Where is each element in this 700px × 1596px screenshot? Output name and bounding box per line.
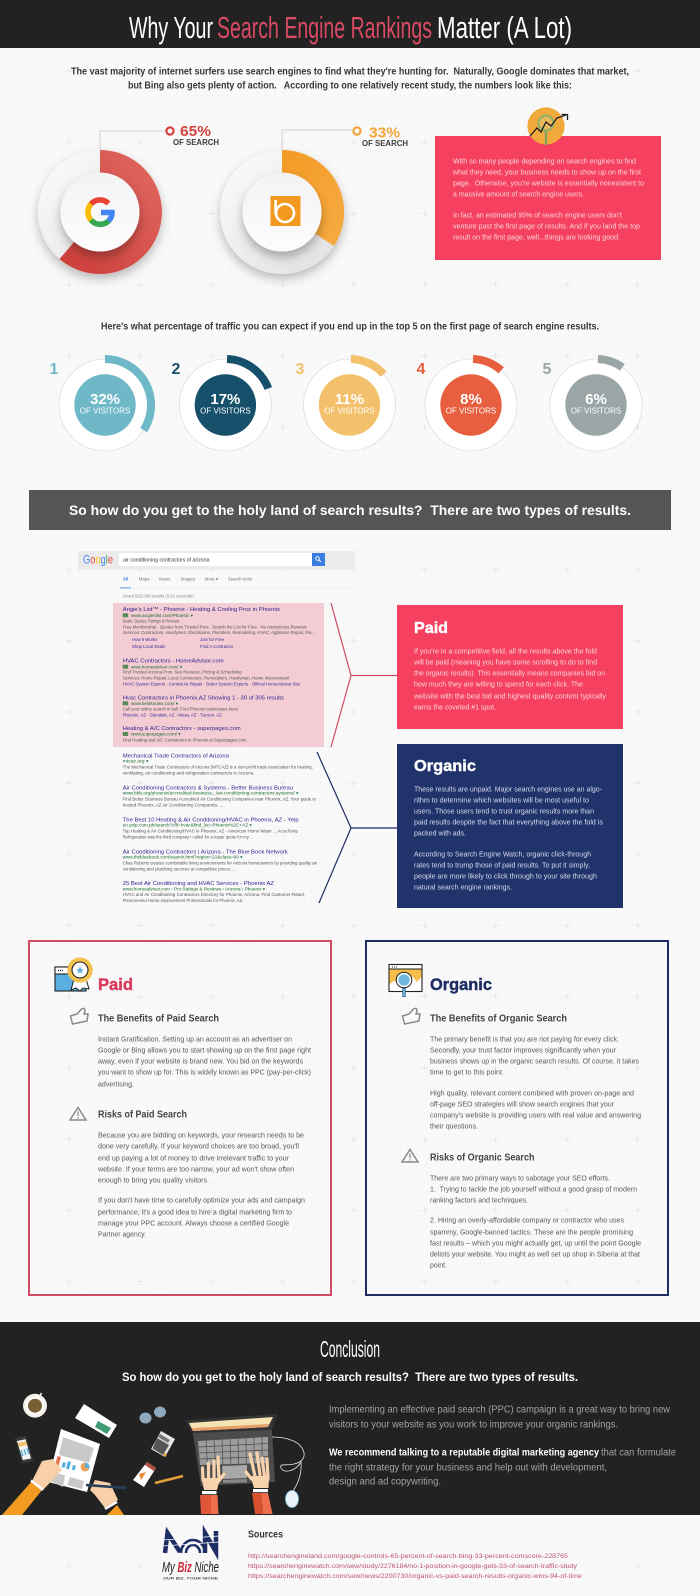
body text: will be paid (meaning you have some scrolling to do to find	[413, 659, 597, 666]
benefits text: time to get to this point.	[430, 1069, 504, 1076]
paid results: www.angieslist.com/Phoenix ▾	[131, 613, 193, 618]
benefits text	[98, 1036, 311, 1088]
heading: Sources	[248, 1530, 283, 1540]
risks text: website. If your terms are too narrow, your ad won't show often	[97, 1166, 294, 1173]
risks text	[97, 1132, 305, 1238]
icon: glasses	[140, 1406, 166, 1424]
google search bar: air conditioning contractors of arizona	[123, 558, 210, 564]
text block: what they need, your business needs to show up on the first	[452, 168, 642, 177]
benefits text: you want to show up for. This is widely known as PPC (pay-per-click)	[98, 1069, 311, 1076]
risks text: spammy, Google-banned tactics. These are the people promising	[430, 1229, 633, 1236]
paid results: Find A Contractor	[200, 644, 234, 649]
organic results: Air Conditioning Contractors | Arizona - The Blue Book Network	[123, 849, 288, 855]
icon: chart in magnifier	[527, 107, 568, 145]
panel: search engine users	[435, 107, 661, 260]
benefits text	[430, 1036, 641, 1130]
search tabs	[120, 576, 355, 598]
benefits text: business shows up in the organic search results. Of course, it takes	[430, 1058, 639, 1065]
banner: holy land question: So how do you get to the holy land of search results? There are two types of results.	[69, 503, 631, 518]
paid results: Services: Home Repair, Local Contractors, Remodelers, Handyman, Home Improvement	[123, 675, 290, 680]
risks text: performance, it's a good idea to hire a digital marketing firm to	[98, 1209, 292, 1216]
heading: conclusion: Conclusion	[320, 1336, 380, 1362]
panel: organic details	[366, 941, 668, 1295]
body text: If you're in a competitive field, all the results above the fold	[414, 648, 597, 655]
risks text: end up paying a lot of money to drive irrelevant traffic to your	[98, 1155, 290, 1162]
organic results: www.thebluebook.com/search.html?region=21&class=90 ▾	[123, 854, 242, 859]
organic results: Refrigeration was the third company I called for a repair quote for my ...	[123, 834, 253, 839]
heading: Organic	[430, 976, 492, 994]
chart: rank 4	[417, 359, 517, 451]
icon: calculator	[151, 1431, 175, 1457]
banner: holy land question	[29, 490, 671, 530]
conclusion text: Implementing an effective paid search (PPC) campaign is a great way to bring new	[329, 1404, 671, 1416]
chart: rank 3	[296, 359, 396, 451]
body text: natural search engine rankings.	[414, 884, 512, 891]
google search bar	[78, 551, 355, 570]
risks text: done very carefully. If your keyword choices are too broad, you'll	[98, 1143, 299, 1150]
risks text: point.	[430, 1262, 447, 1269]
paid results: Join for Free	[200, 637, 225, 642]
chart: rank 1: OF VISITORS	[80, 406, 130, 416]
chart: rank 2: OF VISITORS	[200, 406, 251, 416]
chart: rank 3: 11%	[335, 391, 364, 408]
title: Matter (A Lot)	[437, 10, 572, 45]
illustration: desk with laptop	[2, 1393, 304, 1515]
icon: Bing b	[270, 196, 300, 226]
search tabs: Search tools	[228, 576, 253, 582]
risks text: 1. Trying to tackle the job yourself without a good grasp of modern	[430, 1186, 637, 1193]
paid results: Heating & A/C Contractors - superpages.com	[123, 726, 241, 732]
label: 65% of search: OF SEARCH	[173, 137, 219, 147]
chart: rank 1: 32%	[90, 391, 120, 408]
body text: rates tend to trump those of paid results. To put it simply,	[414, 862, 590, 869]
conclusion text: design and ad copywriting.	[329, 1476, 441, 1488]
paid results: Find Trusted Arizona Pros. See Reviews, Pricing & Scheduling	[123, 670, 242, 675]
benefits text: advertising.	[98, 1081, 134, 1088]
search tabs: About 532,000 results (0.61 seconds)	[123, 594, 194, 598]
organic results	[123, 754, 318, 903]
source links	[248, 1553, 583, 1580]
benefits text: their questions.	[430, 1123, 478, 1130]
panel: conclusion	[0, 1322, 700, 1515]
paid results: Shop Local Deals	[132, 644, 165, 649]
conclusion text: the right strategy for your business and help out with development,	[329, 1462, 607, 1474]
logo: My Biz Niche: My Biz Niche	[162, 1559, 219, 1576]
subheading: Risks of Organic Search	[430, 1152, 534, 1164]
chart: rank 4: 8%	[460, 391, 482, 408]
icon: coffee cup	[23, 1393, 47, 1418]
heading: Paid	[98, 976, 133, 994]
header band with title	[0, 0, 700, 48]
risks text: There are two primary ways to sabotage your SEO efforts.	[430, 1175, 610, 1182]
paid results: Services: Contractors, Handymen, Electricians, Plumbers, Remodeling, HVAC, Appliance Repair, Pai...	[123, 630, 315, 635]
chart: rank 5	[543, 359, 642, 451]
paid results: HVAC Contractors - HomeAdvisor.com	[123, 659, 224, 665]
source links: http://searchengineland.com/google-controls-65-percent-of-search-bing-33-percent-comscore-228765	[248, 1553, 569, 1560]
risks text: manage your PPC account. Always choose a certified Google	[98, 1220, 289, 1227]
text block: result on the first page, well...things are looking good.	[453, 233, 620, 242]
risks text: Partner agency.	[98, 1231, 146, 1238]
heading: Organic	[414, 758, 476, 775]
body text: paid results despite the fact that everything above the fold is	[414, 819, 603, 826]
paid results: Deals, Quotes, Ratings & Reviews	[123, 618, 179, 624]
body text: earns the coveted #1 spot.	[414, 704, 496, 711]
chart: rank 1	[50, 359, 151, 451]
search tabs: News	[159, 576, 171, 582]
chart: rank 5: 6%	[585, 391, 607, 408]
organic results: The Best 10 Heating & Air Conditioning/HVAC in Phoenix, AZ - Yelp	[123, 817, 299, 823]
title: Search Engine Rankings	[217, 10, 432, 45]
source links: https://searchenginewatch.com/sew/study/2276184/no-1-position-in-google-gets-33-of-search-traffic-study	[248, 1563, 578, 1570]
paid results: www.homeadvisor.com/ ▾	[131, 664, 182, 669]
paid results: HVAC System Experts · Central Air Repair · Boiler System Experts · Official HomeAdvisor Site	[123, 681, 301, 686]
paid results: www.bestknows.com/ ▾	[131, 701, 178, 706]
subheading: The Benefits of Organic Search	[430, 1013, 567, 1025]
text block: venture past the first page of results. And if you land the top	[453, 222, 640, 231]
icon: phone	[15, 1436, 33, 1463]
organic results: Chas Roberts creates comfortable living environments for Arizona homeowners by providing quality air	[123, 861, 318, 866]
chart: rank 4: 4	[417, 361, 426, 378]
section heading: traffic: Here's what percentage of traffic you can expect if you end up in the top 5 on the first page of search engine results.	[101, 322, 599, 333]
organic results: www.homeadvisor.com › Pro Ratings & Reviews › Arizona › Phoenix ▾	[123, 886, 265, 891]
benefits text: The primary benefit is that you are not paying for every click.	[430, 1036, 619, 1043]
body text: how much they are willing to spend for each click. The	[414, 681, 583, 688]
search results screenshot	[78, 551, 355, 903]
organic results: 25 Best Air Conditioning and HVAC Services - Phoenix AZ	[123, 881, 274, 887]
icon: report	[48, 1429, 100, 1492]
benefits text: Google or Bing allows you to start showing up on the first page right	[98, 1047, 311, 1054]
search tabs: Images	[181, 576, 196, 582]
benefits text: Instant Gratification. Setting up an account as an advertiser on	[98, 1036, 292, 1043]
benefits text: away, even if your website is brand new. You bid on the keywords	[98, 1058, 304, 1065]
label: 33% of search: 33%	[369, 124, 400, 142]
title: Why Your	[129, 10, 213, 45]
chart: rank 4: OF VISITORS	[446, 406, 496, 416]
organic results: Find Better Business Bureau Accredited Air Conditioning Companies near Phoenix, AZ. Your guide to	[123, 797, 317, 802]
organic results: Mechanical Trade Contractors of Arizona	[123, 754, 230, 760]
chart: rank 3: OF VISITORS	[324, 406, 375, 416]
organic results: Air Conditioning Contractors & Systems - Better Business Bureau	[123, 785, 293, 791]
arrow: organic bracket	[317, 752, 398, 903]
intro text	[71, 66, 629, 92]
risks text: fast results – which you might actually get, up until the point Google	[430, 1240, 641, 1247]
heading: Paid	[414, 620, 448, 637]
body text	[413, 648, 606, 711]
icon: laptop	[185, 1414, 278, 1486]
risks text	[430, 1175, 641, 1269]
benefits text: off-page SEO strategies will show search engines that your	[430, 1101, 615, 1108]
icon: warning	[402, 1150, 418, 1162]
icon: note card and pencil	[133, 1462, 183, 1487]
body text: These results are unpaid. Major search engines use an algo-	[414, 786, 603, 793]
paid results: How It Works	[132, 637, 157, 642]
subheading: The Benefits of Paid Search	[98, 1013, 219, 1025]
panel: paid details	[29, 941, 331, 1295]
icon: window with ribbon badge	[55, 958, 92, 991]
body text: people are more likely to click through to your site through	[414, 873, 597, 880]
conclusion text: We recommend talking to a reputable digital marketing agency	[329, 1448, 599, 1458]
label: 65% of search	[166, 123, 219, 147]
risks text: ranking factors and techniques.	[430, 1197, 528, 1204]
organic results: trusted Phoenix, AZ Air Conditioning Companies, ...	[123, 803, 223, 808]
paid results: Hvac Contractors in Phoenix,AZ Showing 1 - 30 of 305 results	[123, 695, 284, 701]
chart: rank 1: 1	[50, 361, 59, 378]
body text: the organic results). This essentially means companies bid on	[414, 670, 605, 677]
search tabs: More ▾	[205, 576, 218, 582]
organic results: ventilating, air conditioning and refrigeration contractors in Arizona.	[123, 771, 254, 776]
label: 65% of search: 65%	[180, 123, 211, 140]
risks text: 2. Hiring an overly-affordable company or contractor who uses	[430, 1217, 624, 1224]
organic results: The Mechanical Trade Contractors of Arizona (MTCAZ) is a non-profit trade association for heating,	[123, 765, 313, 770]
risks text: enough to bring you quality visitors.	[98, 1177, 209, 1184]
organic results: Top Heating & Air Conditioning/HVAC in Phoenix, AZ - American Home Water ... AccuTemp	[123, 828, 299, 833]
text block	[452, 157, 644, 242]
text block: With so many people depending on search engines to find	[453, 157, 636, 166]
chart: rank 2: 2	[172, 361, 181, 378]
body text	[414, 786, 603, 891]
logo: My Biz Niche: OUR BIZ. YOUR NICHE	[163, 1576, 219, 1580]
chart: Google 65% donut	[38, 123, 219, 274]
subheading: Risks of Paid Search	[98, 1109, 187, 1121]
label: 33% of search	[353, 124, 408, 148]
source links: https://searchenginewatch.com/sew/news/2200730/organic-vs-paid-search-results-organic-wins-94-of-time	[248, 1573, 583, 1580]
body text: packed with ads.	[414, 830, 466, 837]
conclusion text: that can formulate	[601, 1448, 676, 1458]
intro text: but Bing also gets plenty of action. According to one relatively recent study, the numbers look like this:	[128, 80, 572, 92]
conclusion text	[329, 1404, 676, 1488]
paid results: Angie's List™ - Phoenix - Heating & Cooling Pros in Phoenix	[123, 606, 280, 613]
paid results: www.superpages.com/ ▾	[131, 732, 181, 737]
subheading: So how do you get to the holy land of search results? There are two types of results.	[122, 1372, 578, 1384]
risks text: Because you are bidding on keywords, your research needs to be	[98, 1132, 304, 1139]
paid results highlight	[113, 603, 324, 747]
arrow: paid bracket	[331, 603, 398, 747]
icon: thumbs up	[70, 1008, 88, 1024]
paid results	[123, 606, 315, 742]
body text: rithm to determine which websites will be most useful to	[414, 797, 589, 804]
organic results: en.yelp.com.ph/search?cflt=hvac&find_loc=Phoenix%2C+AZ ▾	[123, 823, 252, 828]
google search bar: Google	[83, 552, 113, 566]
panel: organic explanation	[397, 744, 623, 908]
icon: window with magnifier	[389, 964, 422, 997]
paid results: Find Heating and A/C Contractors in Phoenix at Superpages.com.	[123, 737, 248, 742]
icon: typing hands	[200, 1453, 272, 1514]
organic results: Prescreened Home Improvement Professionals for Phoenix, AZ.	[123, 898, 243, 903]
conclusion text: visitors to your website as you work to improve your organic rankings.	[329, 1420, 618, 1430]
paid results: Phoenix, AZ · Glendale, AZ · Mesa, AZ · Tucson, AZ	[123, 712, 222, 717]
label: 33% of search: OF SEARCH	[362, 138, 408, 148]
icon: left hand and sleeve	[2, 1459, 62, 1515]
paid results: Free Membership · Quotes from Trusted Pros · Search the List for Free · No Anonymous Reviews	[123, 624, 307, 630]
organic results: conditioning and plumbing services at competitive prices. ...	[123, 866, 236, 871]
benefits text: company's website is providing users with real value and answering	[430, 1112, 641, 1119]
icon: envelope	[75, 1404, 117, 1438]
icon: thumbs up	[402, 1008, 420, 1024]
paid results: Call your online search in kall. Find Phoenix businesses here!	[123, 706, 238, 711]
intro text: The vast majority of internet surfers use search engines to find what they're hunting for. Naturally, Google dominates that market,	[71, 66, 629, 78]
sources	[248, 1530, 583, 1580]
benefits text: High quality, relevant content combined with proven on-page and	[430, 1090, 634, 1097]
icon: warning	[70, 1108, 86, 1120]
icon: mouse and cord	[272, 1437, 304, 1508]
body text: users. Those users tend to trust organic results more than	[414, 808, 594, 815]
text block: In fact, an estimated 95% of search engine users don't	[453, 211, 623, 220]
body text: website with the best bid and highest quality content typically	[413, 693, 606, 700]
body text: According to Search Engine Watch, organic click-through	[414, 851, 591, 858]
chart: rank 2	[172, 359, 271, 451]
icon: right hand with pen	[86, 1480, 126, 1515]
text block: a massive amount of search engine users.	[453, 190, 584, 199]
chart: rank 5: 5	[543, 361, 552, 378]
search tabs: Maps	[139, 576, 150, 582]
search tabs: All	[123, 576, 128, 582]
organic results: www.bbb.org/phoenix/accredited-business.../air-conditioning-contractors.systems/ ▾	[123, 791, 298, 796]
risks text: If you don't have time to carefully optimize your ads and campaign	[98, 1197, 305, 1204]
chart: rank 5: OF VISITORS	[571, 406, 621, 416]
chart: rank 3: 3	[296, 361, 305, 378]
icon: Google G	[88, 200, 112, 224]
chart: Bing 33% donut	[220, 124, 408, 274]
panel: paid explanation	[397, 605, 623, 729]
logo: My Biz Niche	[162, 1531, 219, 1580]
benefits text: Secondly, your trust factor improves significantly when your	[430, 1047, 617, 1054]
risks text: delists your website. You might as well set up shop in Siberia at that	[430, 1251, 640, 1258]
organic results: mtcaz.org ▾	[123, 759, 148, 764]
chart: rank 2: 17%	[210, 391, 240, 408]
text block: page. Otherwise, you're website is essentially nonexistent to	[453, 179, 644, 188]
organic results: HVAC and Air Conditioning Contractors Directory for Phoenix, Arizona. Find Customer-Rated,	[123, 892, 305, 897]
